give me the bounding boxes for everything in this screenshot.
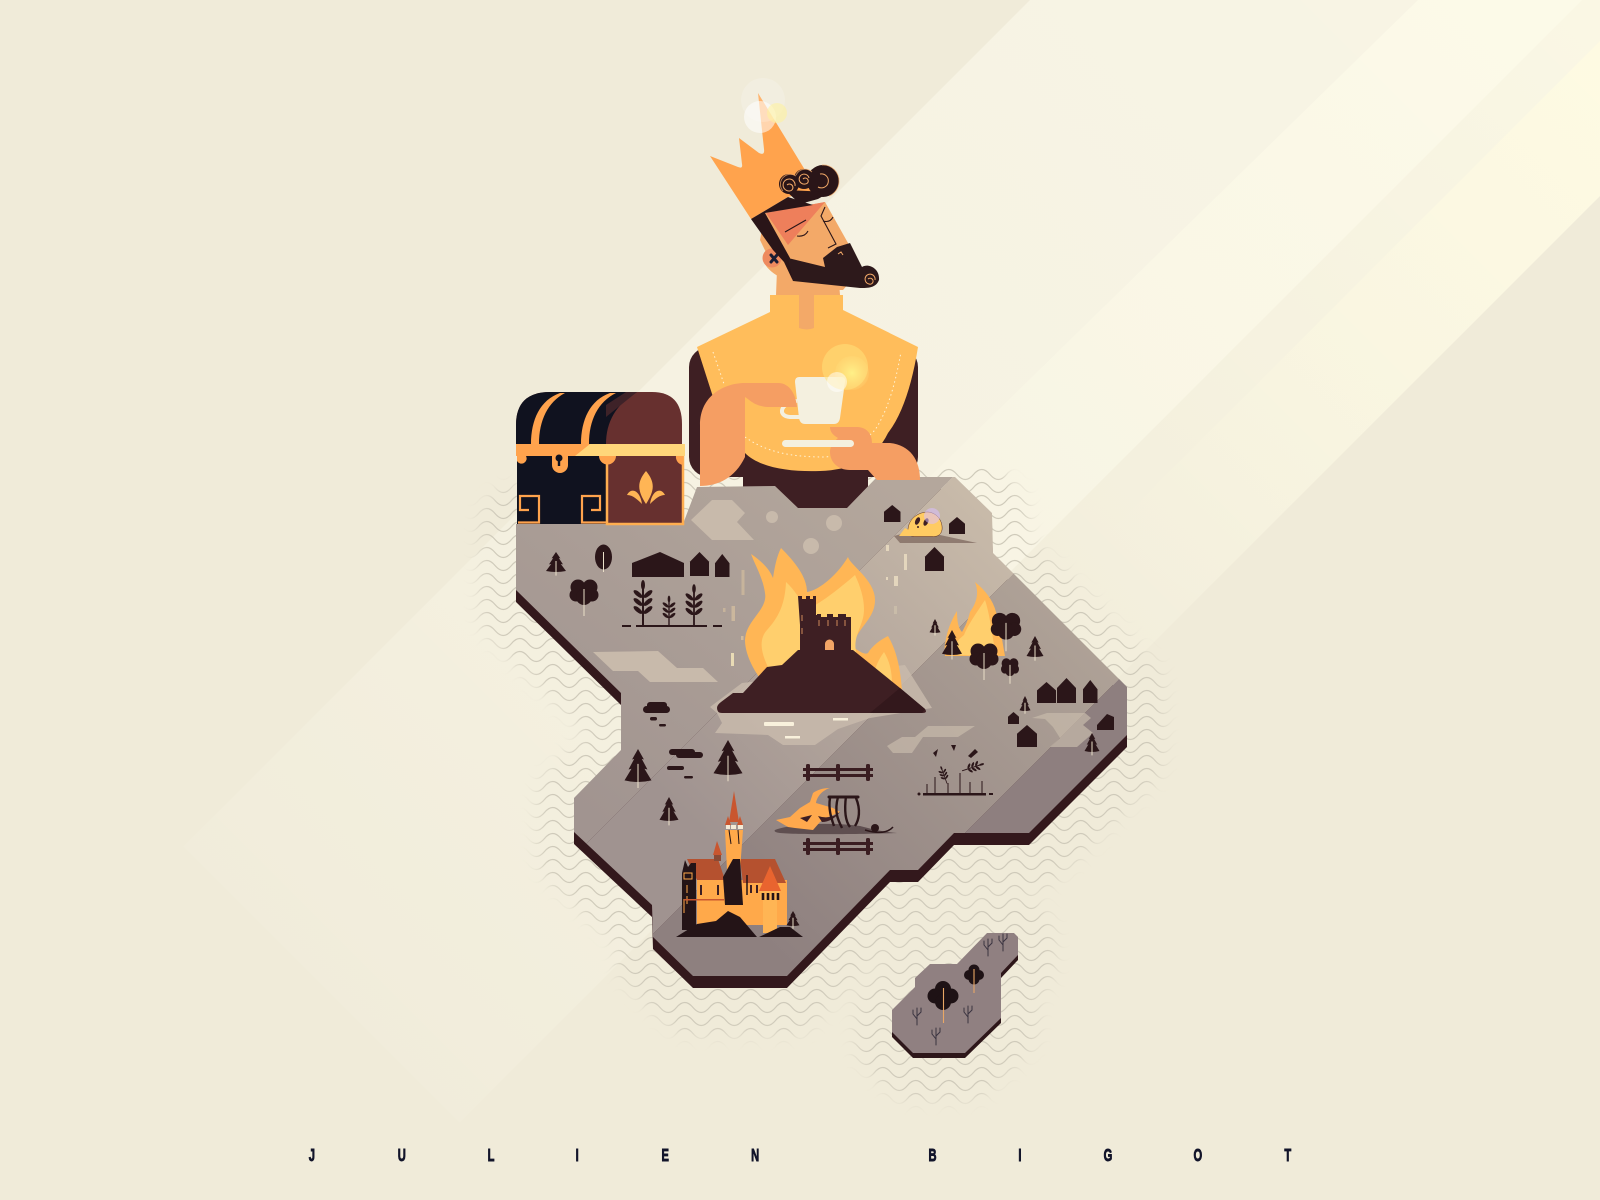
illustration: king over burning map	[308, 0, 1600, 1162]
saucer	[782, 440, 854, 447]
face	[760, 202, 862, 290]
central spire	[725, 830, 743, 870]
teacup	[782, 377, 845, 424]
neck	[776, 270, 840, 330]
mound	[717, 650, 926, 713]
reflections	[764, 718, 848, 738]
burning castle mound	[717, 548, 926, 738]
lone pines and rocks	[624, 702, 742, 825]
left arm and hand	[700, 383, 797, 486]
dark towers	[723, 859, 743, 905]
king	[697, 78, 920, 486]
skull and huts top right	[884, 505, 977, 571]
crown sparkle	[741, 78, 787, 133]
wave pattern around land	[474, 468, 1169, 1104]
treasure chest	[516, 392, 685, 524]
trees top left	[546, 544, 612, 616]
king's back and arms	[689, 347, 918, 510]
hair and sideburn	[751, 197, 813, 281]
island trees	[928, 964, 984, 1023]
castle tower	[798, 596, 851, 652]
farm buildings	[632, 552, 730, 577]
shirt stitching	[713, 352, 901, 457]
main walls	[697, 880, 787, 925]
pale terrain patches	[593, 500, 1093, 753]
burning forest	[930, 582, 1044, 684]
shirt	[697, 295, 918, 471]
ember drips	[723, 545, 907, 666]
castle	[676, 791, 803, 937]
wheat field	[622, 580, 722, 627]
crown	[710, 93, 820, 219]
fences	[803, 764, 873, 855]
big flames	[745, 548, 902, 690]
signature: JULIEN BIGOT	[309, 1145, 1291, 1166]
beard	[788, 243, 879, 288]
right arm and hand	[830, 427, 920, 480]
cow skeleton	[775, 788, 897, 834]
side turret	[713, 841, 722, 855]
right turret	[763, 900, 777, 933]
windows and beams	[701, 885, 757, 895]
village right	[1008, 678, 1114, 755]
map island	[516, 477, 1127, 988]
small island	[892, 933, 1018, 1058]
burnt crops	[918, 745, 993, 796]
ground hills	[676, 911, 757, 937]
ear	[763, 249, 788, 280]
facial lines	[785, 207, 836, 248]
bare trees	[913, 934, 1007, 1045]
earring	[771, 255, 777, 262]
cup glow	[822, 344, 869, 392]
cheek shade	[766, 202, 825, 245]
hair curls	[779, 165, 839, 204]
